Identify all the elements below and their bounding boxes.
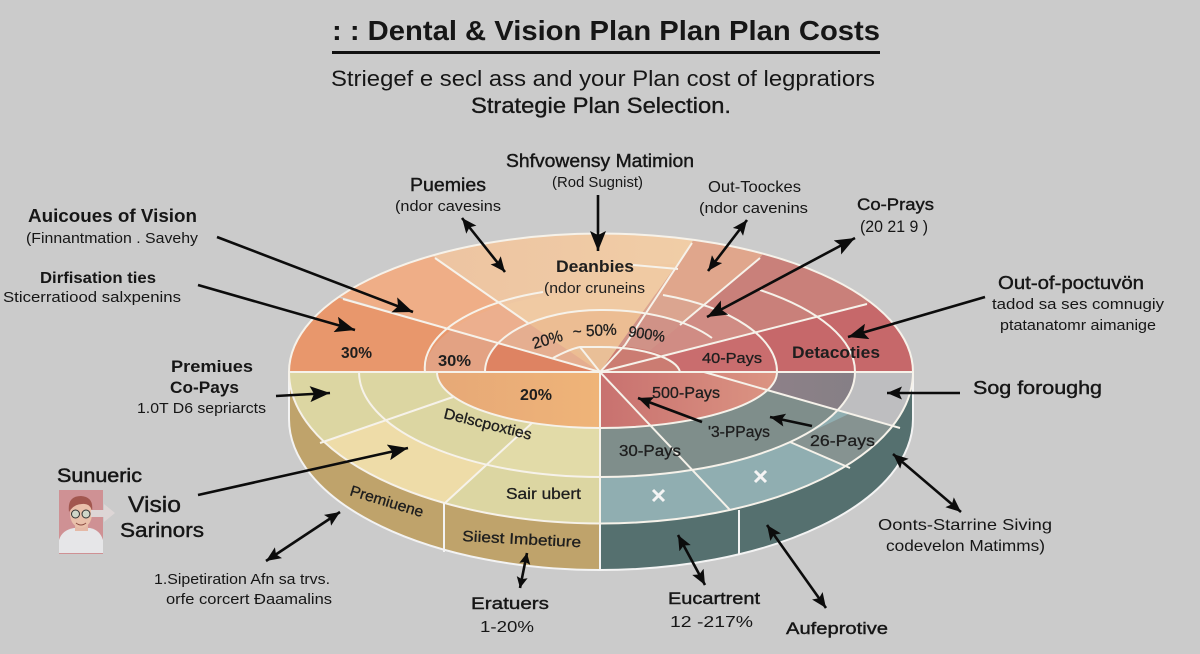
label: eratuers: Eratuers: [471, 594, 549, 613]
label: top centre: [506, 151, 694, 191]
sector labels: Deanbies: [556, 257, 634, 276]
label: vision: [26, 206, 199, 247]
label: co-prays: (20 21 9 ): [860, 217, 928, 236]
sector labels: ~ 50%: [572, 322, 617, 341]
sector labels: Premiuene: [348, 483, 425, 521]
sector labels: 20%: [520, 387, 552, 404]
label: top centre: Shfvowensy Matimion: [506, 151, 694, 171]
pie chart disc: [288, 232, 914, 571]
label: cost-starring: [878, 517, 1052, 555]
label: puemies: (ndor cavesins: [395, 198, 501, 215]
arrows: [198, 195, 985, 608]
label: vision sarinors: [57, 466, 204, 542]
label: aufeprotive: Aufeprotive: [786, 619, 888, 638]
label: vision: Auicoues of Vision: [28, 206, 197, 226]
sector labels: [341, 257, 880, 551]
label: sipetiration: 1.Sipetiration Afn sa trvs.: [154, 571, 330, 588]
label: vision sarinors: Sarinors: [120, 520, 204, 542]
sector labels: 30%: [341, 345, 372, 362]
subtitle: Strategie Plan Selection.: [471, 93, 731, 118]
top half: warm sectors: [290, 234, 912, 371]
label: dirfisation: Dirfisation ties: [40, 270, 156, 287]
sector labels: 26-Pays: [810, 433, 875, 450]
icon: person with glasses: [59, 490, 115, 554]
label: premiums: Co-Pays: [170, 378, 239, 397]
label: premiums: [137, 357, 266, 417]
label: dirfisation: Sticerratiood salxpenins: [3, 289, 181, 306]
label: puemies: [395, 175, 501, 215]
sector labels: 30%: [438, 353, 471, 370]
label: out-of-pocket: tadod sa ses comnugiy: [992, 296, 1165, 313]
sector labels: (ndor cruneins: [544, 280, 645, 297]
label: eucartrent: Eucartrent: [668, 589, 760, 608]
sector labels: 20%: [530, 328, 565, 353]
label: premiums: 1.0T D6 sepriarcts: [137, 400, 266, 417]
label: out-toockes: (ndor cavenins: [699, 200, 808, 217]
label: sipetiration: orfe corcert Ðaamalins: [166, 591, 332, 608]
label: out-of-pocket: [992, 273, 1165, 334]
label: puemies: Puemies: [410, 175, 486, 195]
label: cost-starring: Oonts-Starrine Siving: [878, 517, 1052, 534]
label: co-prays: [857, 195, 934, 236]
label: vision: (Finnantmation . Savehy: [26, 230, 199, 247]
label: eratuers: 1-20%: [480, 619, 534, 636]
label: eucartrent: 12 -217%: [670, 614, 753, 631]
label: sipetiration: [154, 571, 332, 608]
label: out-of-pocket: Out-of-poctuvön: [998, 273, 1144, 293]
sector labels: 30-Pays: [619, 443, 681, 460]
sector labels: Delscpoxties: [442, 405, 533, 444]
label: top centre: (Rod Sugnist): [552, 174, 643, 191]
disc side wall: teal: [600, 372, 913, 570]
label: vision sarinors: Visio: [128, 492, 181, 517]
label: out-of-pocket: ptatanatomr aimanige: [1000, 317, 1156, 334]
label: cost-starring: codevelon Matimms): [886, 538, 1045, 555]
label: out-toockes: [699, 179, 808, 217]
label: sog foroughg: Sog foroughg: [973, 378, 1102, 398]
lower half: yellow and teal sectors: [290, 373, 912, 522]
label: out-toockes: Out-Toockes: [708, 179, 801, 196]
cross marks: [653, 471, 766, 501]
disc side wall: tan: [289, 372, 600, 570]
label: premiums: Premiues: [171, 357, 253, 376]
sector labels: '3-PPays: [708, 424, 770, 441]
subtitle: Striegef e secl ass and your Plan cost of legpratiors: [331, 66, 875, 91]
sector labels: 40-Pays: [702, 350, 762, 367]
label: co-prays: Co-Prays: [857, 195, 934, 214]
title: : : Dental & Vision Plan Plan Plan Costs: [332, 15, 880, 46]
subtitle: [331, 66, 875, 118]
sector labels: Sair ubert: [506, 486, 582, 503]
label: eucartrent: [668, 589, 760, 631]
sector dividing lines: [289, 234, 913, 523]
sector labels: Detacoties: [792, 343, 880, 362]
label: vision sarinors: Sunueric: [57, 466, 142, 487]
sector labels: 500-Pays: [652, 385, 720, 402]
label: eratuers: [471, 594, 549, 636]
sector labels: Siiest Imbetiure: [462, 528, 582, 551]
label: dirfisation: [3, 270, 181, 306]
sector labels: 900%: [627, 323, 666, 346]
